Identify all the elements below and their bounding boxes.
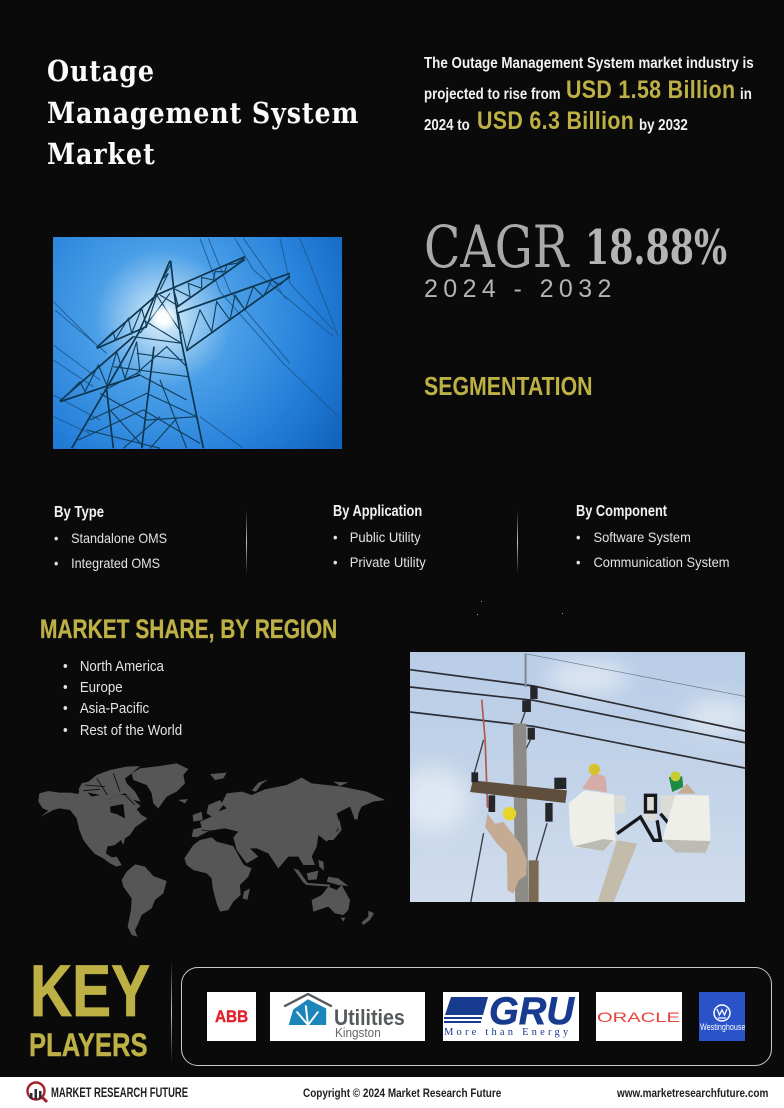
region list: Asia-Pacific	[80, 700, 149, 717]
projection line 3 start: 2024 to	[424, 117, 470, 134]
segment items: Private Utility	[350, 554, 426, 570]
GRU stripes mark	[444, 997, 488, 1023]
logos panel	[181, 967, 772, 1066]
copyright: Copyright © 2024 Market Research Future	[303, 1086, 501, 1100]
segment heading: By Type	[54, 504, 104, 521]
CAGR label: CAGR	[424, 213, 569, 281]
logo: Westinghouse	[699, 992, 745, 1041]
segment: by type	[54, 504, 167, 571]
heading: market share by region: MARKET SHARE, BY REGION	[40, 614, 337, 644]
segment items: Software System	[593, 529, 691, 545]
word: in: in	[740, 86, 752, 103]
house mark	[284, 993, 332, 1025]
photo: transmission tower	[53, 237, 342, 449]
value: USD 6.3 Billion: USD 6.3 Billion	[477, 107, 634, 135]
Africa	[184, 837, 252, 912]
W circle mark	[713, 1004, 731, 1022]
boom joints	[614, 794, 677, 820]
Oracle text: ORACLE	[597, 1009, 680, 1025]
Southeast Asia islands	[293, 860, 348, 887]
pole	[513, 724, 528, 902]
heading: segmentation: SEGMENTATION	[424, 371, 593, 401]
Iceland	[210, 773, 227, 780]
segment items	[333, 529, 426, 570]
segment items	[54, 530, 167, 571]
segment items	[576, 529, 729, 570]
logo: Utilities Kingston	[270, 992, 425, 1041]
segment items: Communication System	[593, 554, 729, 570]
left bucket	[569, 790, 615, 851]
photo: line workers on utility pole	[410, 652, 745, 902]
Svalbard and small islands	[178, 779, 348, 803]
North America	[38, 790, 147, 867]
segment items: •	[54, 530, 58, 546]
brand name: MARKET RESEARCH FUTURE	[51, 1085, 188, 1100]
segment items: •	[333, 529, 338, 545]
logo: ABB	[207, 992, 256, 1041]
logo mark	[26, 1081, 48, 1103]
worker on pole	[485, 814, 527, 894]
Japan and Sakhalin	[327, 805, 360, 840]
segment heading: By Application	[333, 503, 422, 520]
CAGR years: 2024 - 2032	[424, 275, 617, 303]
segment heading: By Component	[576, 503, 667, 520]
Arctic islands	[78, 766, 141, 802]
footer	[0, 1077, 784, 1108]
segment items: Integrated OMS	[71, 554, 160, 570]
title	[47, 54, 359, 171]
Eurasia	[192, 778, 385, 868]
region list: •	[63, 722, 68, 739]
Hudson Bay and channels	[110, 804, 125, 818]
title: Outage	[47, 54, 155, 88]
Greenland	[132, 763, 188, 808]
region list: Europe	[80, 679, 123, 696]
logo: Oracle	[596, 992, 682, 1041]
market projection text	[424, 55, 754, 135]
logo: GRU	[443, 992, 579, 1041]
CAGR value: 18.88%	[585, 220, 727, 276]
region list: •	[63, 700, 68, 717]
projection line 2: projected to rise from	[424, 86, 561, 103]
crossarm	[470, 780, 567, 803]
segment items: Standalone OMS	[71, 530, 167, 546]
workers in buckets	[582, 772, 607, 792]
projection line 1: The Outage Management System market industry is	[424, 55, 754, 72]
Australia	[312, 885, 350, 922]
region list: •	[63, 679, 68, 696]
segment items: •	[333, 554, 338, 570]
segment items: •	[576, 554, 581, 570]
ABB text: ABB	[215, 1007, 248, 1026]
segment: by application	[333, 503, 426, 570]
KEY: KEY	[30, 951, 150, 1032]
region list: Rest of the World	[80, 722, 182, 739]
website: www.marketresearchfuture.com	[617, 1086, 768, 1100]
projection line 3 end: by 2032	[639, 117, 688, 134]
segment items: Public Utility	[350, 529, 421, 545]
PLAYERS: PLAYERS	[29, 1027, 148, 1063]
boom arm	[598, 840, 637, 902]
segment: by component	[576, 503, 729, 570]
South America	[122, 864, 167, 937]
value: USD 1.58 Billion: USD 1.58 Billion	[566, 76, 735, 104]
world map	[38, 763, 385, 936]
Utilities text: Utilities	[334, 1005, 405, 1030]
segment items: •	[54, 554, 58, 570]
region list: North America	[80, 658, 164, 675]
tagline: More than Energy	[444, 1027, 571, 1038]
right bucket	[662, 795, 711, 853]
title: Management System	[47, 96, 359, 130]
heading: key players	[29, 951, 150, 1063]
region list	[63, 658, 182, 739]
region list: •	[63, 658, 68, 675]
segment items: •	[576, 529, 581, 545]
title: Market	[47, 137, 156, 171]
CAGR block	[424, 213, 727, 303]
Madagascar	[243, 888, 250, 900]
Westinghouse text: Westinghouse	[700, 1022, 745, 1032]
Britain	[193, 812, 203, 822]
New Zealand	[362, 911, 374, 925]
Kingston text: Kingston	[335, 1026, 381, 1040]
